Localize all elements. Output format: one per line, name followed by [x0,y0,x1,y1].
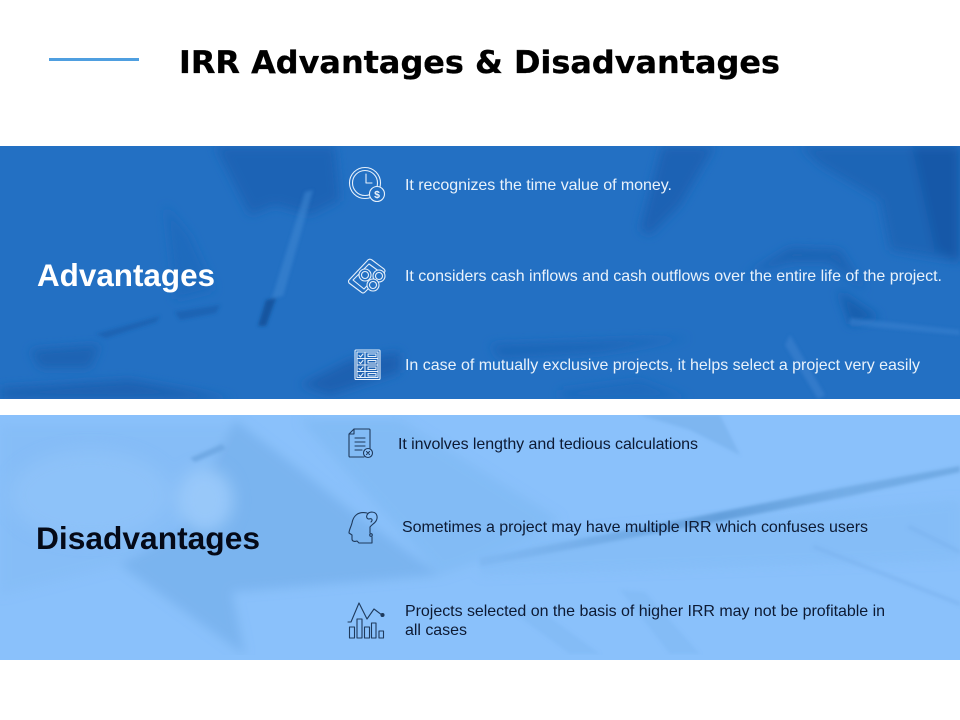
text: mutually exclusive projects: In case of mutually exclusive projects, it helps select a project very easily [405,357,920,374]
panel: disadvantages [0,415,960,660]
icon: head with question mark [349,512,377,543]
text: multiple IRR: Sometimes a project may have multiple IRR which confuses users [402,519,868,536]
text: time value of money: It recognizes the time value of money. [405,177,672,194]
icon: checklist table [355,350,380,380]
icon: line chart with bars [348,603,384,638]
text: higher IRR not profitable [405,603,885,639]
icon: clock with dollar coin: $ [374,189,380,201]
text: lengthy calculations: It involves lengthy and tedious calculations [398,436,698,453]
text: higher IRR not profitable: Projects selected on the basis of higher IRR may not be profitable in [405,603,885,620]
title: IRR Advantages & Disadvantages [179,45,780,81]
text: cash inflows and outflows: It considers cash inflows and cash outflows over the entire life of the project. [405,268,942,285]
icon: clock with dollar coin [350,168,384,202]
title accent line [49,58,139,61]
heading: Disadvantages: Disadvantages [36,520,260,556]
icon: document with cross [349,429,372,458]
panel: advantages [0,146,960,399]
icon: cash and coins [348,259,385,293]
heading: Advantages: Advantages [37,257,215,293]
text: higher IRR not profitable: all cases [405,622,467,639]
